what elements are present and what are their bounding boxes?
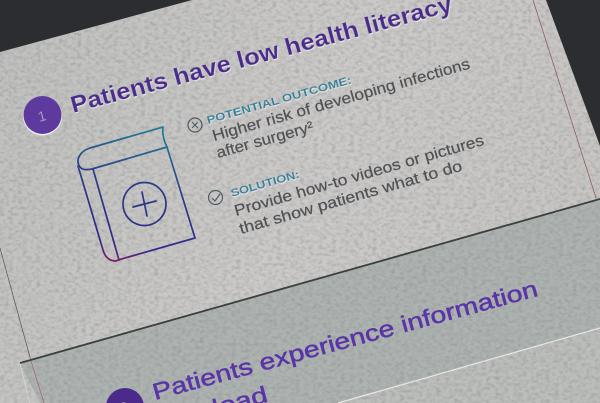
heading: Patients have low health literacy bbox=[68, 0, 455, 118]
icon: check in circle bbox=[208, 190, 222, 204]
number badge 2 bbox=[106, 388, 144, 403]
section divider rule bbox=[20, 199, 600, 363]
crop line: left bbox=[0, 248, 44, 403]
white rule at bottom of panel bbox=[338, 328, 600, 403]
panel: lower paper strip beyond white rule bbox=[340, 329, 600, 403]
outcome label: POTENTIAL OUTCOME: bbox=[206, 74, 353, 127]
heading: Patients experience information bbox=[149, 275, 540, 403]
outcome block bbox=[188, 56, 472, 162]
solution block: that show patients what to do bbox=[237, 158, 464, 238]
heading bbox=[149, 275, 540, 403]
panel: lower tinted section bbox=[20, 198, 600, 403]
solution text: Provide how-to videos or pictures bbox=[232, 132, 486, 220]
icon: x in circle bbox=[188, 118, 202, 132]
icon: open book with plus bbox=[78, 127, 195, 261]
outcome text: Higher risk of developing infections bbox=[210, 56, 472, 145]
white panel left edge bbox=[20, 364, 30, 403]
outcome block: after surgery² bbox=[215, 119, 315, 162]
number badge 1: 1 bbox=[36, 107, 48, 125]
panel: patients experience information overload bbox=[106, 275, 540, 403]
solution label: SOLUTION: bbox=[230, 169, 301, 200]
number badge 1 bbox=[23, 96, 62, 136]
panel: patients have low health literacy bbox=[23, 0, 486, 261]
solution block bbox=[208, 132, 486, 238]
crop line: right bbox=[533, 0, 596, 198]
